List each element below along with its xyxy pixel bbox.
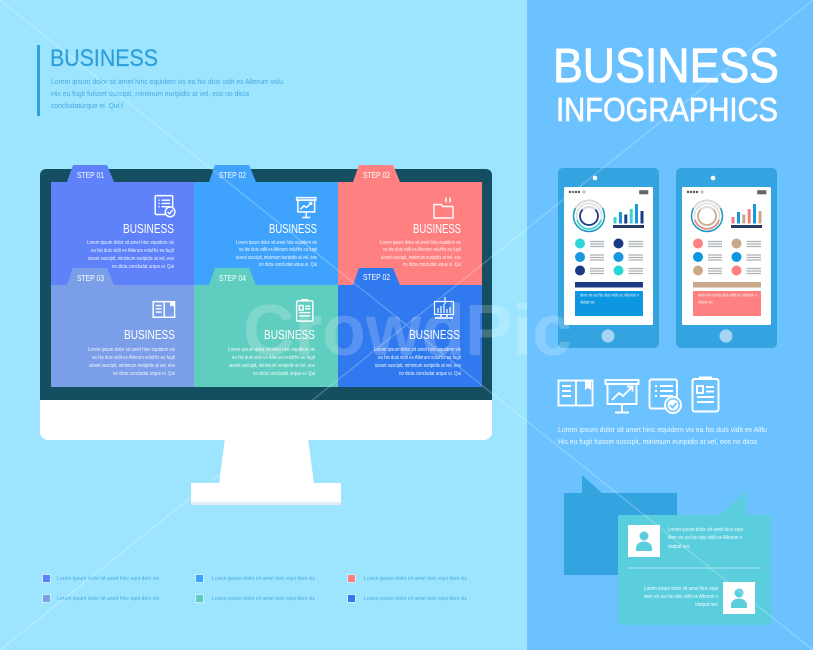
bar chart (613, 204, 644, 228)
panel: step 04 (194, 268, 338, 387)
panel: step 02 red: Lorem ipsum dolor sit amet hinc equidem vis (380, 240, 461, 246)
left heading block: BUSINESS (50, 45, 158, 72)
icon: folder (434, 198, 453, 218)
panel: step 02 dark blue: uisset suscipit, minimum euripidis at vel, eos (375, 363, 461, 369)
left heading block: concludaturque ei. Qui f (51, 103, 123, 110)
legend: Lorem ipsum dolor sit amet hinc equi dem vis (212, 596, 315, 602)
panel: step 01 (51, 165, 194, 285)
icon row caption (558, 425, 767, 446)
panel: step 02 dark blue: ea his duis vidit ex Alterum voluHis eu fugit (378, 355, 462, 361)
status bar (687, 190, 766, 194)
panel: step 04: Lorem ipsum dolor sit amet hinc equidem vis (228, 347, 315, 353)
panel: step 02 blue: uisset suscipit, minimum euripidis at vel, eos (236, 255, 317, 261)
icon: checked document (650, 380, 681, 413)
speech bubble: front with messages (618, 491, 771, 625)
panel: step 02 blue (194, 165, 338, 285)
icon row (558, 378, 718, 413)
icon: book (153, 302, 175, 317)
text box (693, 291, 761, 316)
panel: step 01: uisset suscipit, minimum euripidis at vel, eos (88, 256, 174, 262)
icon row caption: Lorem ipsum dolor sit amet hinc equidem vis ea his duis vidit ex Altlu (558, 425, 767, 434)
title: INFOGRAPHICS (556, 92, 778, 129)
panel: step 02 red: BUSINESS (413, 221, 461, 236)
panel: step 02 blue: Lorem ipsum dolor sit amet hinc equidem vis (236, 240, 317, 246)
status circles (575, 238, 643, 276)
icon: checked document (155, 196, 175, 217)
left heading block: His eu fugit fuisset suscipit, minimum euripidis at vel, eos no dicta (51, 91, 249, 98)
tan bar (693, 282, 761, 288)
message top: olutpat nec (668, 544, 690, 550)
avatar top (628, 525, 660, 557)
text box: olutpat nec (580, 300, 596, 304)
bar chart (731, 204, 762, 228)
panel: step 01: no dicta concludat urque ei. Qui (112, 264, 174, 270)
panel: step 01: STEP 01 (77, 171, 104, 180)
panel: step 03: ea his duis vidit ex Alterum voluHis eu fugit (92, 355, 176, 361)
legend: Lorem ipsum dolor sit amet hinc equi dem vis (57, 576, 159, 582)
panel: step 02 dark blue: no dicta concludat urque ei. Qui (399, 371, 461, 377)
status circles (693, 238, 761, 276)
text box (575, 291, 643, 316)
donut chart (692, 200, 722, 232)
left heading block: Lorem ipsum dolor sit amet hinc equidem vis ea his duis vidit ex Alterum volu (51, 79, 283, 86)
legend: Lorem ipsum dolor sit amet hinc equi dem vis (57, 596, 159, 602)
panel: step 02 red: STEP 02 (363, 171, 390, 180)
text box: dem vis ea his duis vidit ex Alterum v (698, 292, 758, 298)
panel: step 02 blue: STEP 02 (219, 171, 246, 180)
panel: step 04: STEP 04 (219, 274, 246, 283)
panel: step 02 dark blue: BUSINESS (409, 327, 460, 342)
panel: step 02 red: ea his duis vidit ex Alterum voluHis eu fugit (383, 247, 461, 253)
icon: presentation board (606, 380, 638, 412)
watermark: CrowdPic (243, 291, 572, 371)
message bottom: dem vis ea his duis vidit ex Alterum v (644, 594, 718, 600)
monitor frame (40, 169, 492, 400)
icon: clipboard (297, 300, 313, 321)
message top (668, 527, 743, 550)
panel: step 03: STEP 03 (77, 274, 104, 283)
left heading block (37, 45, 283, 116)
panel: step 03: BUSINESS (124, 327, 175, 342)
panel: step 01: Lorem ipsum dolor sit amet hinc equidem vis (87, 240, 174, 246)
icon: clipboard (692, 378, 718, 412)
message bottom: Lorem ipsum dolor sit amet hinc equi (644, 586, 718, 592)
text box: olutpat nec (698, 300, 714, 304)
legend: Lorem ipsum dolor sit amet hinc equi dem vis (364, 576, 467, 582)
panel: step 04: uisset suscipit, minimum euripidis at vel, eos (229, 363, 315, 369)
phone: coral theme (676, 168, 777, 348)
donut chart (574, 200, 604, 232)
monitor stand (191, 438, 341, 505)
title (553, 40, 779, 129)
panel: step 04: ea his duis vidit ex Alterum voluHis eu fugit (232, 355, 316, 361)
icon: presentation board (297, 198, 316, 217)
message bottom: olutpat nec (695, 602, 718, 608)
phone: blue theme (558, 168, 659, 348)
dark bar (575, 282, 643, 288)
panel: step 02 red: no dicta concludat urque ei. Qui (403, 262, 461, 268)
panel: step 03: Lorem ipsum dolor sit amet hinc equidem vis (88, 347, 175, 353)
icon row caption: His eu fugit fuisset suscipit, minimum euripidis at vel, eos no dicta (558, 437, 758, 446)
panel: step 03: uisset suscipit, minimum euripidis at vel, eos (89, 363, 175, 369)
legend (42, 574, 467, 602)
panel: step 02 dark blue (338, 268, 482, 387)
icon: book (558, 380, 592, 406)
panel: step 02 blue: no dicta concludat urque ei. Qui (259, 262, 317, 268)
legend: Lorem ipsum dolor sit amet hinc equi dem vis (364, 596, 467, 602)
icon: bar chart monitor (434, 297, 454, 318)
monitor white chin (40, 400, 492, 440)
message top: Lorem ipsum dolor sit amet hinc equi (668, 527, 743, 533)
panel: step 01: BUSINESS (123, 221, 174, 236)
message bottom (644, 586, 718, 608)
text box: dem vis ea his duis vidit ex Alterum v (580, 292, 640, 298)
panel: step 01: ea his duis vidit ex Alterum voluHis eu fugit (91, 248, 175, 254)
panel: step 02 red: uisset suscipit, minimum euripidis at vel, eos (381, 255, 461, 261)
status bar (569, 190, 648, 194)
avatar bottom (723, 582, 755, 614)
panel: step 02 dark blue: STEP 02 (363, 273, 390, 282)
monitor (40, 165, 492, 505)
panel: step 04: no dicta concludat urque ei. Qui (253, 371, 315, 377)
message top: dem vis ea his duis vidit ex Alterum v (668, 535, 742, 541)
panel: step 02 red (338, 165, 482, 285)
panel: step 03 (51, 268, 194, 387)
panel: step 04: BUSINESS (264, 327, 315, 342)
panel: step 03: no dicta concludat urque ei. Qui (113, 371, 175, 377)
title: BUSINESS (553, 40, 779, 93)
panel: step 02 blue: BUSINESS (269, 221, 317, 236)
legend: Lorem ipsum dolor sit amet hinc equi dem vis (212, 576, 315, 582)
panel: step 02 dark blue: Lorem ipsum dolor sit amet hinc equidem vis (374, 347, 461, 353)
speech bubble: back (564, 475, 677, 575)
panel: step 02 blue: ea his duis vidit ex Alterum voluHis eu fugit (239, 247, 317, 253)
